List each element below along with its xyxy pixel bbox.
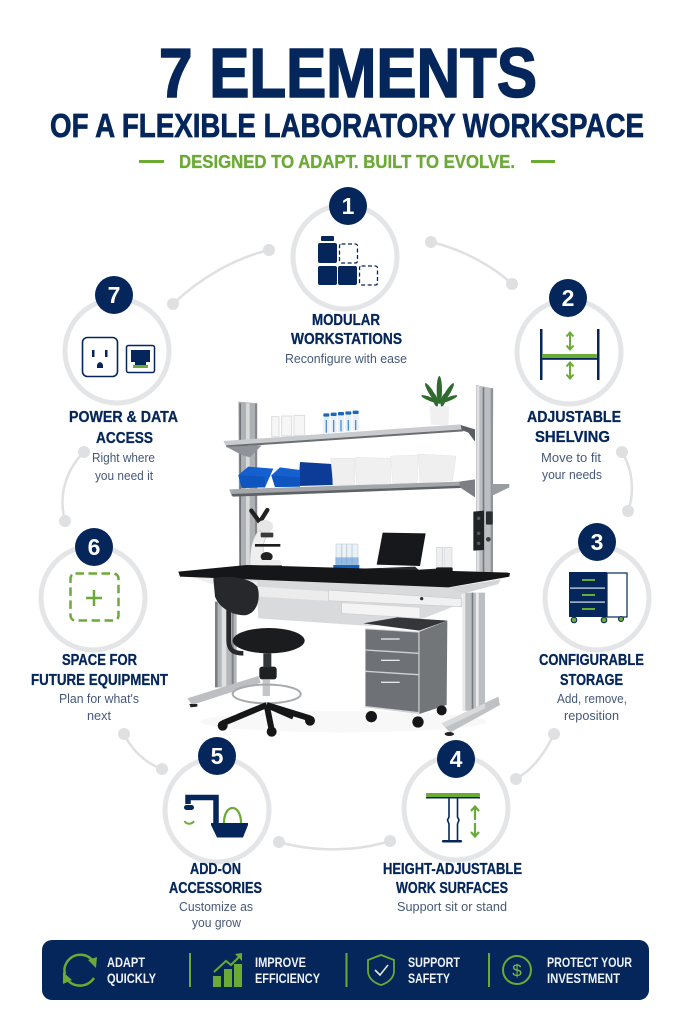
badge 5: 5 [211,743,224,769]
benefit: support safety: SAFETY [408,970,450,986]
heading 6: FUTURE EQUIPMENT [31,672,168,689]
icon: outlet and data port [82,338,154,376]
heading 7: ACCESS [96,430,153,447]
text 6: next [87,708,111,723]
text 3: Add, remove, [557,691,627,706]
heading 2: SHELVING [535,429,610,446]
heading 1: WORKSTATIONS [291,331,402,348]
badge 1: 1 [342,193,355,219]
badge 7 [95,276,133,314]
white bins [331,454,456,485]
clear glass jars [272,415,305,437]
text 1: Reconfigure with ease [285,351,407,366]
panel: element 7 power and data access [65,276,178,483]
benefit: adapt quickly: QUICKLY [107,970,157,986]
illustration: lab workbench [178,376,510,737]
heading 5 [169,861,262,897]
test tube rack [333,544,359,570]
panel: element 6 space for future equipment [31,528,168,723]
text 6: Plan for what's [59,691,139,706]
benefit: protect your investment: PROTECT YOUR [547,954,632,970]
text 7 [92,450,155,483]
badge 1 [329,187,367,225]
icon: height adjustable table [426,793,480,842]
right upright [476,385,493,573]
benefit: improve efficiency [213,953,321,987]
text 2: Move to fit [541,450,601,465]
panel: element 4 height-adjustable work surfaces [383,740,522,914]
benefit: improve efficiency: EFFICIENCY [255,970,321,986]
tagline: DESIGNED TO ADAPT. BUILT TO EVOLVE. [179,152,515,172]
benefit: adapt quickly: ADAPT [107,954,145,970]
microscope [247,510,282,569]
heading 3: CONFIGURABLE [539,652,644,669]
benefit: adapt quickly [63,954,157,986]
panel: element 1 modular workstations [285,187,407,366]
benefit: support safety: SUPPORT [408,954,460,970]
heading 1 [291,312,402,348]
text 2: your needs [542,467,602,482]
connector arcs [59,236,634,849]
heading 6: SPACE FOR [62,652,137,669]
badge 5 [198,737,236,775]
heading 7: POWER & DATA [69,409,178,426]
title: 7 ELEMENTS [159,34,537,112]
text 3: reposition [564,708,619,723]
heading 4: WORK SURFACES [396,880,508,897]
glass cylinders [436,547,453,574]
left leg [187,602,261,707]
benefit: support safety [368,954,460,986]
text 5: you grow [192,915,242,930]
heading 4 [383,861,522,897]
badge 6 [75,528,113,566]
icon: dashed plus [70,574,118,620]
heading 5: ACCESSORIES [169,880,262,897]
potted plant [421,376,458,425]
heading 7 [69,409,178,447]
benefit: improve efficiency: IMPROVE [255,954,306,970]
heading 1: MODULAR [312,312,380,329]
heading 3 [539,652,644,689]
panel: element 3 configurable storage [539,523,649,723]
badge 4: 4 [450,746,463,772]
footer band [42,940,649,1000]
benefit: protect your investment: $ [512,961,522,980]
left upright [238,402,257,567]
icon: faucet and basket [184,798,248,838]
badge 3 [578,523,616,561]
text 2 [541,450,602,482]
icon: storage cabinet [569,572,627,623]
text 5: Customize as [179,899,253,914]
benefit: protect your investment: INVESTMENT [547,970,620,986]
right leg [442,593,500,736]
text 5 [179,899,253,930]
lab stool [213,577,315,737]
table top [178,565,510,587]
laptop [362,533,437,575]
floor shadow [200,711,487,732]
badge 7: 7 [108,282,120,308]
text 3 [557,691,627,723]
text 7: you need it [95,468,153,483]
power strip [473,511,493,551]
icon: modular blocks [318,236,378,285]
title [50,34,644,144]
badge 2 [549,279,587,317]
table apron [193,577,501,626]
heading 4: HEIGHT-ADJUSTABLE [383,861,522,878]
mobile cabinet [363,617,447,728]
heading 3: STORAGE [560,672,623,689]
badge 4 [437,740,475,778]
top shelf [223,424,475,457]
heading 2 [527,409,621,446]
lower shelf [229,479,509,497]
icon: adjustable shelf [540,329,600,380]
panel: element 2 adjustable shelving [517,279,621,482]
badge 6: 6 [88,534,100,560]
text 6 [59,691,139,723]
badge 2: 2 [562,285,574,311]
blue-capped vials [323,411,359,433]
badge 3: 3 [591,529,603,555]
heading 6 [31,652,168,689]
panel: element 5 add-on accessories [165,737,269,930]
text 7: Right where [92,450,155,465]
heading 2: ADJUSTABLE [527,409,621,426]
text 4: Support sit or stand [397,899,507,914]
heading 5: ADD-ON [190,861,241,878]
benefit: protect your investment [503,954,632,986]
blue bins [238,462,333,488]
